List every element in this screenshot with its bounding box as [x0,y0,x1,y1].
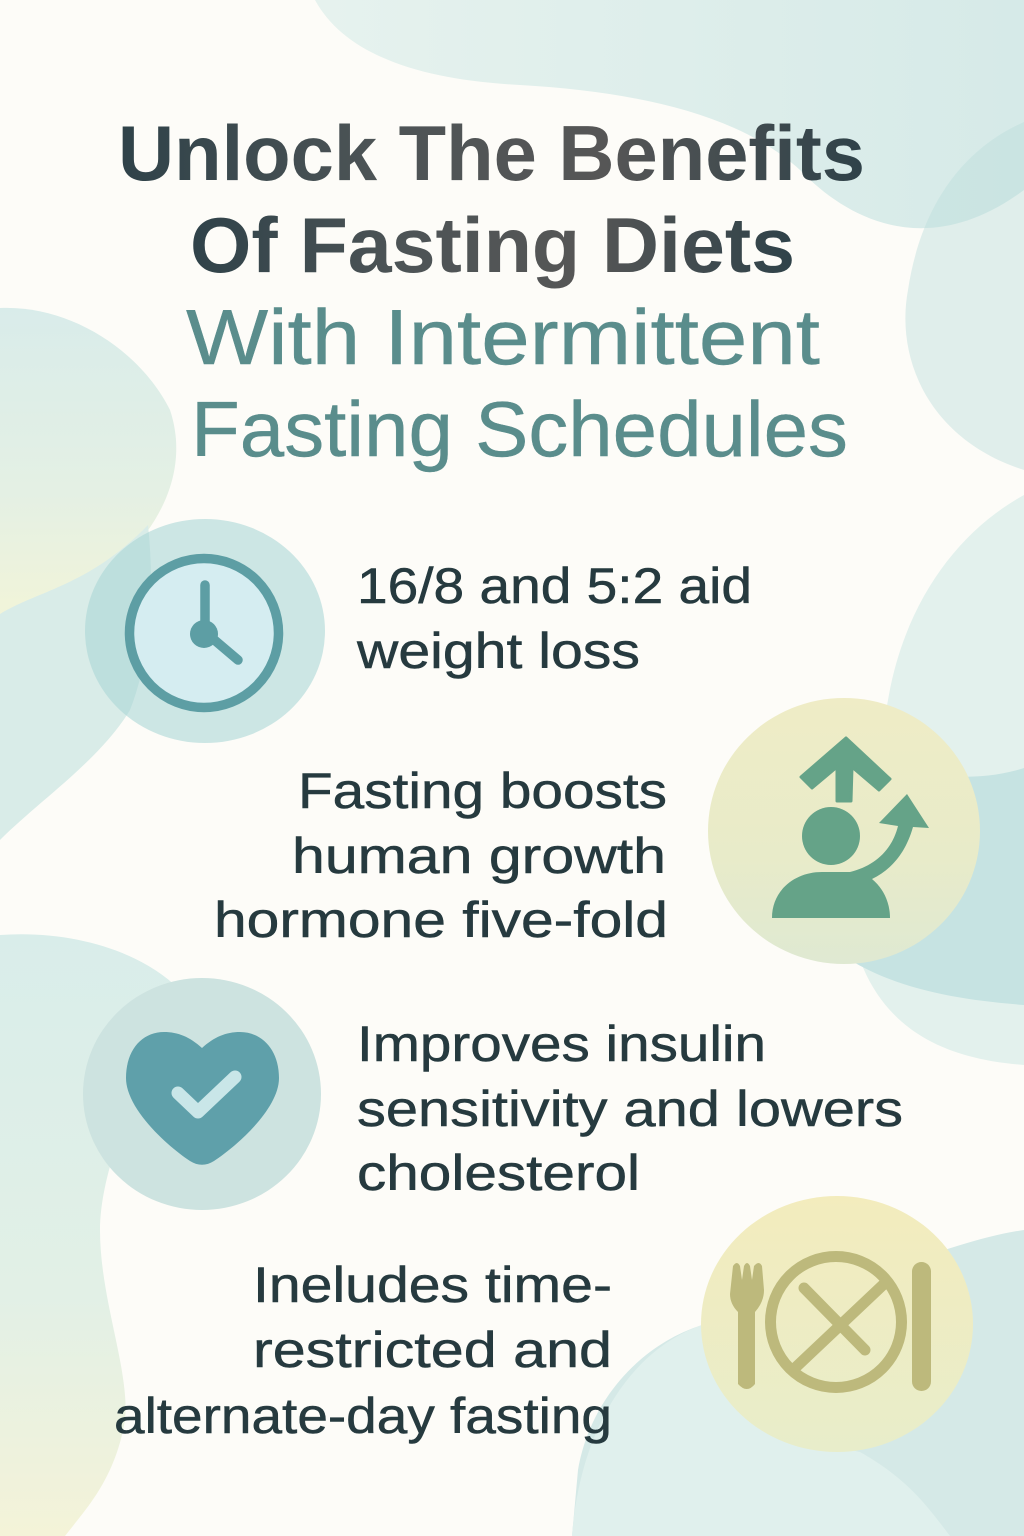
blob: right upper overlay [905,122,1024,470]
text: fasting types: restricted and [253,1322,612,1378]
blob: right middle dark [850,768,1024,1005]
blob: left lower [0,525,151,840]
title [118,109,865,473]
title line 2: Of Fasting Diets [190,201,795,289]
icon: person with arrows [708,698,980,964]
subtitle line 1: With Intermittent [186,293,820,381]
icon: plate with fork and knife [701,1196,973,1452]
text: weight loss: 16/8 and 5:2 aid [357,558,752,614]
blob: top right [315,0,1024,228]
title line 1: Unlock The Benefits [118,109,865,197]
text: insulin: Improves insulin [357,1016,766,1072]
text: weight loss [356,558,752,679]
text: insulin: cholesterol [357,1145,640,1201]
icon: clock [85,519,325,743]
text: growth hormone: hormone five-fold [214,892,668,948]
text: growth hormone: Fasting boosts [298,763,667,819]
blob: bottom right [572,1230,1024,1536]
text: fasting types [114,1257,612,1444]
text: weight loss: weight loss [356,623,640,679]
icon: heart with check [83,978,321,1210]
blob: bottom right light [572,1325,950,1536]
subtitle line 2: Fasting Schedules [191,385,848,473]
text: growth hormone [214,763,668,948]
text: growth hormone: human growth [292,828,666,884]
text: fasting types: Ineludes time- [253,1257,612,1313]
text: insulin [357,1016,903,1201]
text: fasting types: alternate-day fasting [114,1388,612,1444]
blob: bottom left [0,934,180,1536]
blob: left upper [0,308,176,614]
blob: right middle [857,495,1024,1065]
text: insulin: sensitivity and lowers [357,1081,903,1137]
